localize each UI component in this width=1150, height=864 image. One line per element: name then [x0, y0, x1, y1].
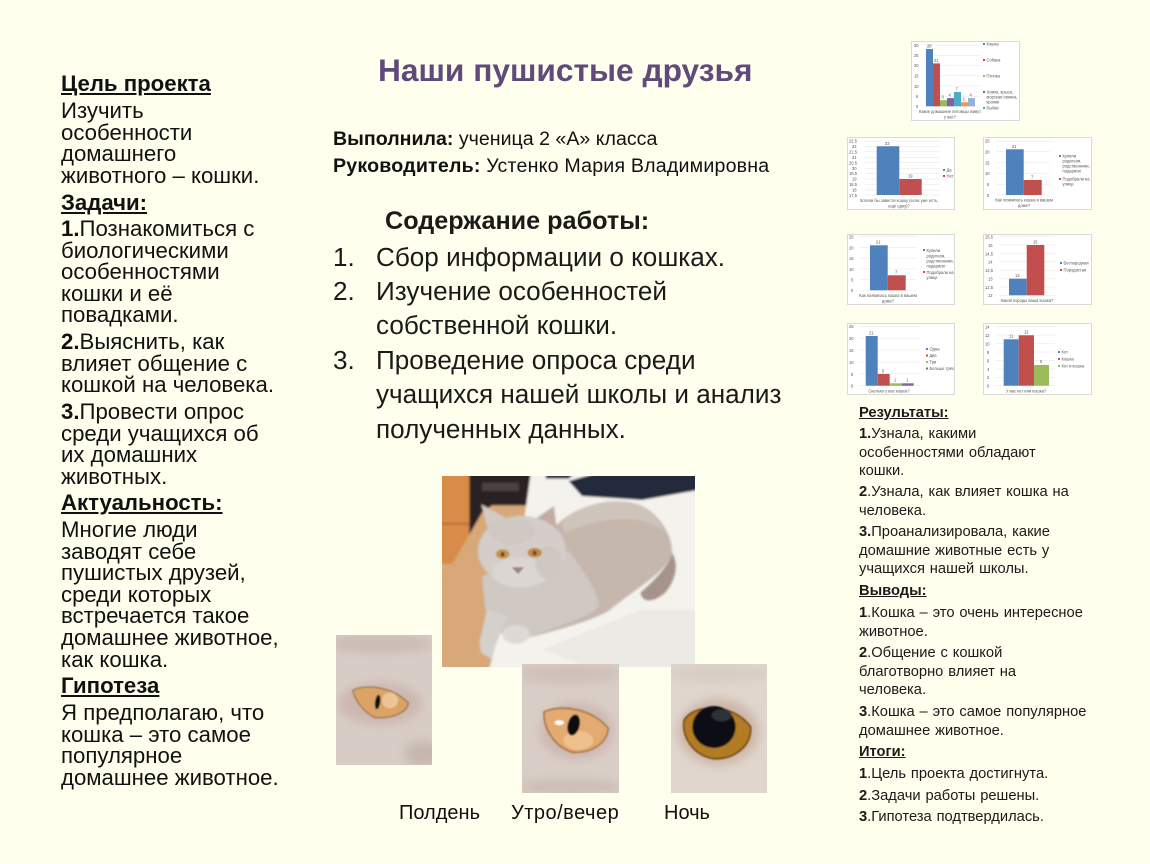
text: task 2: влияет общение с — [61, 351, 247, 376]
chart: how many cats — [848, 324, 954, 394]
chart: how the cat appeared, top: 20 — [985, 150, 990, 154]
chart: which pets do you have: 2 — [962, 96, 966, 102]
chart: which pets do you have: Рыбки — [986, 106, 999, 110]
text: conclusion 2: благотворно влияет на — [859, 664, 1016, 680]
text: hypothesis — [61, 700, 279, 790]
chart: would you like a cat: 19 — [852, 176, 857, 182]
chart: which pets do you have: Какие домашние питомцы живут — [919, 109, 981, 114]
heading: relevance: Актуальность: — [61, 490, 223, 515]
chart: tom or female cat: 10 — [985, 342, 990, 346]
chart: cat breed: 12 — [988, 293, 993, 298]
chart: would you like a cat: 20,5 — [849, 160, 858, 166]
title: Наши пушистые друзья — [378, 52, 752, 88]
text: conclusion 3: 3.Кошка – это самое популярное — [859, 704, 1086, 720]
text: task 1: особенностями — [61, 259, 220, 284]
chart: cat breed: 15,5 — [985, 234, 994, 240]
text: project goal: животного – кошки. — [61, 163, 259, 188]
chart: how the cat appeared, second: Купили — [926, 248, 940, 253]
chart: which pets do you have: 4 — [948, 92, 952, 98]
chart: tom or female cat: 12 — [1024, 330, 1029, 334]
chart: how the cat appeared, second: 20 — [849, 246, 854, 250]
chart: how many cats: 1 — [894, 378, 897, 382]
chart: would you like a cat: 21,5 — [849, 150, 858, 154]
chart: how the cat appeared, second: 7 — [895, 270, 898, 274]
chart: how many cats: 21 — [869, 330, 874, 336]
text: conclusion 1: 1.Кошка – это очень интересное — [859, 605, 1083, 621]
chart: cat breed: Какой породы ваша кошка? — [1001, 298, 1054, 303]
text: hypothesis: домашнее животное. — [61, 765, 279, 790]
chart: how the cat appeared, top: 25 — [985, 138, 990, 144]
chart: would you like a cat: Нет — [946, 174, 954, 178]
chart: how many cats: 0 — [851, 384, 854, 388]
photo: cat on table — [442, 476, 695, 667]
text: relevance: встречается такое — [61, 603, 249, 628]
list: contents: 2. — [333, 276, 355, 306]
chart: which pets do you have: 25 — [914, 53, 919, 58]
chart: tom or female cat: 6 — [987, 358, 990, 364]
chart: which pets do you have: 3 — [942, 94, 944, 100]
text: task 3: их домашних — [61, 442, 197, 467]
chart: tom or female cat: 12 — [985, 333, 990, 338]
list: contents: учащихся нашей школы и анализ — [376, 379, 781, 409]
chart: how the cat appeared, second: 0 — [851, 288, 854, 293]
heading: tasks: Задачи: — [61, 190, 147, 215]
text: conclusion 3 — [859, 704, 1086, 739]
chart: how the cat appeared, top: 0 — [987, 193, 990, 198]
heading: results: Результаты: — [859, 405, 949, 421]
list: contents: Изучение особенностей — [376, 276, 667, 306]
text: conclusion 2: человека. — [859, 682, 926, 698]
photo: eye at morning and evening — [522, 664, 619, 793]
chart: how the cat appeared, second: 5 — [851, 278, 854, 282]
chart: how the cat appeared, top: Подобрали на — [1062, 176, 1090, 182]
text: relevance: как кошка. — [61, 647, 168, 672]
chart: how the cat appeared, second: родственники, — [926, 258, 954, 264]
chart: how many cats: 15 — [849, 348, 854, 353]
text: result 3: домашние животные есть у — [859, 543, 1049, 559]
chart: which pets do you have: Хомяк, крыса, — [986, 90, 1013, 94]
chart: which pets do you have: 0 — [916, 104, 919, 109]
chart: which pets do you have: Кошка — [986, 42, 999, 46]
heading: outcomes: Итоги: — [859, 744, 906, 760]
list: contents: 3. — [333, 345, 355, 375]
chart: how many cats: 20 — [849, 336, 854, 341]
text: relevance: домашнее животное, — [61, 625, 279, 650]
heading: project goal: Цель проекта — [61, 71, 211, 96]
chart: how the cat appeared, top: доме? — [1018, 203, 1031, 208]
chart: which pets do you have: у вас? — [944, 114, 957, 120]
text: hypothesis: Я предполагаю, что — [61, 700, 264, 725]
chart: how many cats: Три — [930, 360, 936, 364]
chart: tom or female cat: Кошка — [1062, 356, 1074, 362]
chart: how the cat appeared, top: подарили — [1062, 168, 1081, 174]
chart: which pets do you have: морская свинка, — [986, 94, 1018, 100]
text: conclusion 2 — [859, 645, 1016, 698]
chart: cat breed: 14,5 — [985, 252, 994, 256]
chart: tom or female cat — [984, 324, 1092, 394]
text: result 3 — [859, 524, 1050, 577]
panel: results and conclusions column — [859, 405, 1086, 825]
text: conclusion 3: домашнее животное. — [859, 723, 1004, 739]
chart: cat breed: 15 — [988, 243, 993, 248]
chart: how the cat appeared, second: 25 — [849, 234, 854, 240]
chart: cat breed — [984, 234, 1092, 304]
chart: tom or female cat: 2 — [987, 375, 990, 380]
chart: tom or female cat: Кот и кошка — [1062, 364, 1085, 368]
text: outcome 1: 1.Цель проекта достигнута. — [859, 766, 1048, 782]
chart: how many cats: 1 — [906, 378, 909, 382]
chart: cat breed: Породистая — [1064, 268, 1086, 272]
text: relevance: среди которых — [61, 582, 211, 607]
chart: which pets do you have: 10 — [914, 84, 919, 89]
heading: contents: Содержание работы: — [385, 207, 649, 235]
text: relevance: Многие люди — [61, 517, 198, 542]
chart: which pets do you have — [912, 42, 1020, 120]
chart: how many cats: Две — [930, 353, 937, 358]
text: project goal — [61, 98, 259, 188]
text: task 1: кошки и её — [61, 281, 173, 306]
text: task 3: животных. — [61, 464, 167, 489]
text: outcome 3: 3.Гипотеза подтвердилась. — [859, 809, 1044, 825]
chart: how the cat appeared, top: улице — [1062, 182, 1074, 186]
chart: how the cat appeared, second: Подобрали на — [926, 270, 954, 275]
chart: would you like a cat: 17,5 — [849, 193, 858, 198]
chart: which pets do you have: Птичка — [986, 74, 1001, 78]
chart: how the cat appeared, second: родители, — [926, 254, 945, 258]
chart: tom or female cat: У вас кот или кошка? — [1006, 388, 1047, 394]
chart: how many cats: 10 — [849, 360, 854, 365]
chart: would you like a cat — [848, 138, 954, 210]
chart: how the cat appeared, top: 21 — [1012, 144, 1017, 149]
text: author and supervisor: Руководитель: Устенко Мария Владимировна — [333, 155, 769, 177]
chart: would you like a cat: 18 — [852, 188, 857, 192]
chart: how the cat appeared, second: Как появилась кошка в вашем — [859, 293, 917, 298]
text: result 1: 1.Узнала, какими — [859, 426, 976, 442]
chart: would you like a cat: Хотели бы завести кошку (если уже есть, — [860, 198, 938, 203]
text: author and supervisor — [333, 128, 770, 177]
chart: how the cat appeared, top: 10 — [985, 171, 990, 176]
list: contents: полученных данных. — [376, 414, 626, 444]
chart: would you like a cat: 18,5 — [849, 182, 858, 187]
chart: how the cat appeared, second: 15 — [849, 256, 854, 261]
chart: how the cat appeared, second: подарили — [926, 264, 945, 268]
text: result 3: 3.Проанализировала, какие — [859, 524, 1050, 540]
text: task 3: среди учащихся об — [61, 421, 259, 446]
chart: would you like a cat: 20 — [852, 166, 857, 171]
panel: survey charts — [847, 41, 1092, 395]
chart: which pets do you have: 21 — [934, 58, 939, 63]
chart: cat breed: 13,5 — [985, 268, 994, 273]
chart: which pets do you have: кролик — [986, 100, 999, 104]
text: hypothesis: кошка – это самое — [61, 722, 251, 747]
text: task 2: кошкой на человека. — [61, 372, 274, 397]
text: task 2 — [61, 329, 274, 397]
list: contents — [333, 242, 781, 444]
chart: how the cat appeared, second: доме? — [882, 298, 895, 304]
text: task 3 — [61, 399, 259, 489]
text: task 1: 1.Познакомиться с — [61, 216, 254, 241]
text: task 3: 3.Провести опрос — [61, 399, 244, 424]
text: result 2: человека. — [859, 503, 926, 519]
chart: how many cats: Больше трёх — [930, 366, 954, 371]
chart: would you like a cat: 22 — [885, 141, 890, 146]
photo: eye at noon — [336, 635, 432, 765]
text: outcome 2: 2.Задачи работы решены. — [859, 788, 1039, 804]
chart: tom or female cat: Кот — [1062, 350, 1068, 354]
text: hypothesis: популярное — [61, 743, 182, 768]
chart: would you like a cat: 22 — [852, 144, 857, 149]
chart: how the cat appeared, top: 15 — [985, 160, 990, 166]
list: contents: Сбор информации о кошках. — [376, 242, 725, 272]
chart: how many cats: 5 — [882, 368, 885, 374]
panel: project goals column — [61, 71, 279, 790]
text: task 1: повадками. — [61, 302, 179, 327]
chart: which pets do you have: 7 — [956, 86, 958, 92]
chart: would you like a cat: 19,5 — [849, 171, 858, 176]
list: contents: 1. — [333, 242, 355, 272]
text: task 1 — [61, 216, 254, 327]
chart: how many cats: 5 — [851, 372, 854, 377]
chart: cat breed: 13 — [988, 276, 993, 282]
chart: tom or female cat: 11 — [1009, 334, 1014, 338]
captions: eye photos: Утро/вечер — [511, 802, 619, 824]
chart: tom or female cat: 0 — [987, 384, 990, 388]
text: project goal: домашнего — [61, 141, 176, 166]
chart: tom or female cat: 8 — [987, 350, 990, 355]
captions: eye photos — [399, 802, 710, 824]
photo: eye at night — [671, 664, 767, 793]
text: result 1 — [859, 426, 1036, 479]
chart: how the cat appeared, second — [848, 234, 954, 304]
chart: which pets do you have: 5 — [916, 94, 919, 99]
list: contents: Проведение опроса среди — [376, 345, 696, 375]
chart: would you like a cat: Да — [946, 168, 952, 172]
text: conclusion 2: 2.Общение с кошкой — [859, 645, 1002, 661]
chart: would you like a cat: 21 — [852, 155, 857, 160]
chart: how the cat appeared, second: улице — [926, 275, 938, 280]
chart: how many cats: Сколько у вас кошек? — [868, 388, 910, 394]
text: author and supervisor: Выполнила: ученица 2 «А» класса — [333, 128, 657, 150]
chart: which pets do you have: 20 — [914, 63, 919, 68]
chart: how the cat appeared, top — [984, 138, 1092, 210]
chart: how the cat appeared, top: 7 — [1031, 174, 1034, 180]
chart: would you like a cat: ещё одну)? — [888, 204, 911, 208]
text: project goal: Изучить — [61, 98, 144, 123]
chart: how the cat appeared, second: 10 — [849, 267, 854, 272]
text: relevance — [61, 517, 279, 672]
chart: tom or female cat: 14 — [985, 324, 990, 330]
chart: how the cat appeared, top: Как появилась кошка в вашем — [995, 198, 1053, 202]
text: result 2 — [859, 484, 1069, 519]
heading: hypothesis: Гипотеза — [61, 673, 159, 698]
chart: which pets do you have: 28 — [927, 44, 932, 48]
chart: how many cats: 25 — [849, 324, 854, 329]
chart: would you like a cat: 19 — [908, 174, 913, 178]
text: conclusion 1: животное. — [859, 624, 928, 640]
text: task 1: биологическими — [61, 238, 229, 263]
chart: how the cat appeared, top: 5 — [987, 182, 990, 187]
chart: cat breed: 12,5 — [985, 285, 994, 290]
captions: eye photos: Полдень — [399, 802, 480, 824]
chart: which pets do you have: 30 — [914, 43, 919, 48]
chart: which pets do you have: 4 — [970, 92, 972, 98]
chart: cat breed: 13 — [1015, 273, 1020, 278]
chart: tom or female cat: 5 — [1040, 359, 1043, 364]
text: conclusion 1 — [859, 605, 1083, 640]
chart: cat breed: Беспородная — [1064, 260, 1089, 266]
text: relevance: пушистых друзей, — [61, 560, 246, 585]
chart: how the cat appeared, top: родители, — [1062, 158, 1081, 164]
chart: which pets do you have: Собака — [986, 58, 1001, 62]
chart: which pets do you have: 15 — [914, 74, 919, 78]
chart: how the cat appeared, second: 21 — [876, 240, 881, 244]
text: result 2: 2.Узнала, как влияет кошка на — [859, 484, 1069, 500]
heading: conclusions: Выводы: — [859, 583, 927, 599]
chart: cat breed: 14 — [988, 260, 993, 264]
text: relevance: заводят себе — [61, 539, 196, 564]
chart: how the cat appeared, top: родственники, — [1062, 164, 1090, 168]
text: result 1: особенностями обладают — [859, 445, 1036, 461]
chart: cat breed: 15 — [1033, 240, 1038, 244]
chart: would you like a cat: 22,5 — [849, 138, 858, 144]
chart: tom or female cat: 4 — [987, 367, 990, 372]
list: contents: собственной кошки. — [376, 310, 617, 340]
text: task 2: 2.Выяснить, как — [61, 329, 224, 354]
text: result 3: учащихся нашей школы. — [859, 561, 1029, 577]
text: result 1: кошки. — [859, 463, 904, 479]
chart: how the cat appeared, top: Купили — [1062, 154, 1076, 158]
text: project goal: особенности — [61, 120, 192, 145]
captions: eye photos: Ночь — [664, 802, 710, 824]
chart: how many cats: Одна — [930, 346, 940, 352]
